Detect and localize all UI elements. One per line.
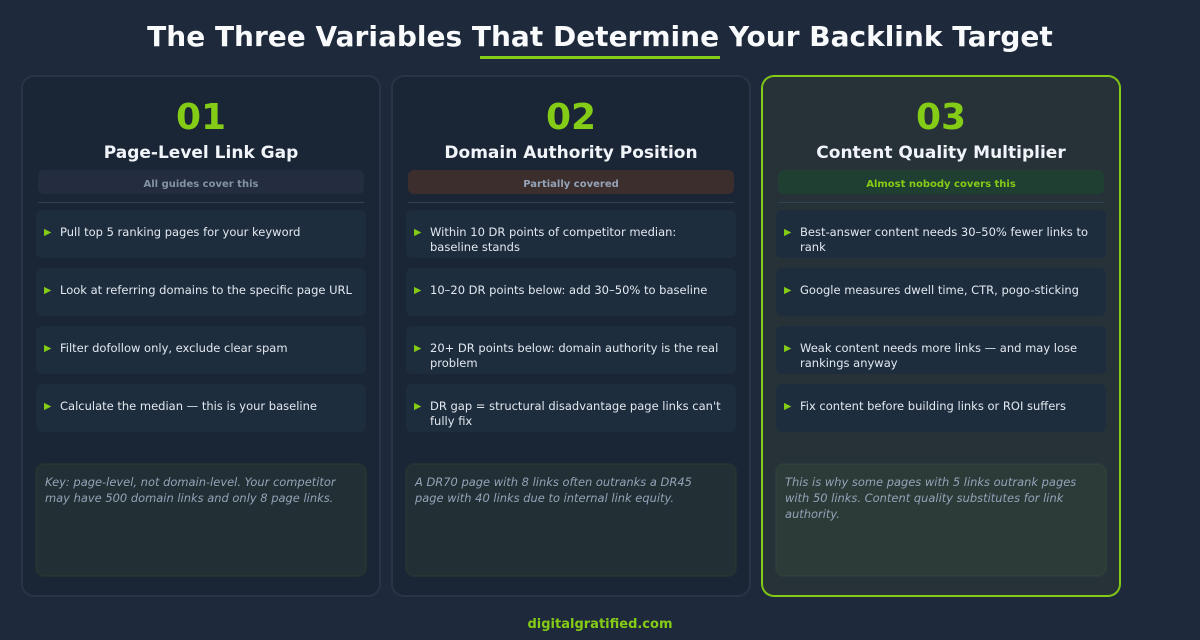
list item 1: Pull top 5 ranking pages for your keyword — [60, 225, 300, 239]
list item 4: ▶ — [784, 401, 791, 412]
list item 4: DR gap = structural disadvantage page links can't fully fix — [430, 399, 721, 428]
list item 4 — [406, 384, 736, 432]
panel heading: Domain Authority Position — [444, 143, 698, 163]
list item 1: ▶ — [44, 227, 51, 238]
list item 4: Calculate the median — this is your baseline — [60, 399, 317, 413]
list item 4 — [36, 384, 366, 432]
list item 2: ▶ — [784, 285, 791, 296]
coverage badge: Almost nobody covers this — [866, 179, 1016, 190]
title underline — [480, 56, 720, 59]
list item 2: Look at referring domains to the specific page URL — [60, 283, 352, 297]
list item 4: ▶ — [44, 401, 51, 412]
list item 2: 10–20 DR points below: add 30–50% to baseline — [430, 283, 707, 297]
list item 4 — [776, 384, 1106, 432]
note callout: A DR70 page with 8 links often outranks a DR45 page with 40 links due to internal link equity. — [415, 475, 692, 505]
list item 1 — [36, 210, 366, 258]
list item 3 — [406, 326, 736, 374]
coverage badge — [408, 170, 734, 194]
list item 3: 20+ DR points below: domain authority is the real problem — [430, 341, 718, 370]
list item 2 — [776, 268, 1106, 316]
panel: content quality multiplier — [762, 76, 1120, 596]
panel: domain authority position — [392, 76, 750, 596]
list item 1: Best-answer content needs 30–50% fewer links to rank — [800, 225, 1088, 254]
list item 3: ▶ — [414, 343, 421, 354]
panel heading: Content Quality Multiplier — [816, 143, 1066, 163]
list item 2: ▶ — [44, 285, 51, 296]
panel heading: Page-Level Link Gap — [104, 143, 298, 163]
list item 2: Google measures dwell time, CTR, pogo-sticking — [800, 283, 1079, 297]
list item 2: ▶ — [414, 285, 421, 296]
footer: digitalgratified.com — [527, 617, 672, 632]
list item 1: ▶ — [784, 227, 791, 238]
coverage badge: Partially covered — [523, 179, 619, 190]
note callout: This is why some pages with 5 links outrank pages with 50 links. Content quality substitutes for link authority. — [785, 475, 1076, 521]
list item 3 — [776, 326, 1106, 374]
list item 3: Weak content needs more links — and may lose rankings anyway — [800, 341, 1077, 370]
list item 2 — [406, 268, 736, 316]
coverage badge — [778, 170, 1104, 194]
list item 4: ▶ — [414, 401, 421, 412]
note callout — [776, 464, 1106, 576]
note callout — [406, 464, 736, 576]
note callout: Key: page-level, not domain-level. Your competitor may have 500 domain links and only 8 page links. — [45, 475, 336, 505]
coverage badge — [38, 170, 364, 194]
list item 3: Filter dofollow only, exclude clear spam — [60, 341, 288, 355]
list item 3: ▶ — [784, 343, 791, 354]
list item 3 — [36, 326, 366, 374]
coverage badge: All guides cover this — [144, 179, 258, 190]
title: The Three Variables That Determine Your Backlink Target — [147, 20, 1053, 53]
list item 1: ▶ — [414, 227, 421, 238]
list item 1: Within 10 DR points of competitor median: baseline stands — [430, 225, 676, 254]
list item 3: ▶ — [44, 343, 51, 354]
list item 4: Fix content before building links or ROI suffers — [800, 399, 1066, 413]
note callout — [36, 464, 366, 576]
panel: page-level link gap — [22, 76, 380, 596]
list item 1 — [776, 210, 1106, 258]
panel number 01: 01 — [176, 97, 226, 138]
panel number 02: 02 — [546, 97, 596, 138]
panel number 03: 03 — [916, 97, 966, 138]
list item 2 — [36, 268, 366, 316]
list item 1 — [406, 210, 736, 258]
